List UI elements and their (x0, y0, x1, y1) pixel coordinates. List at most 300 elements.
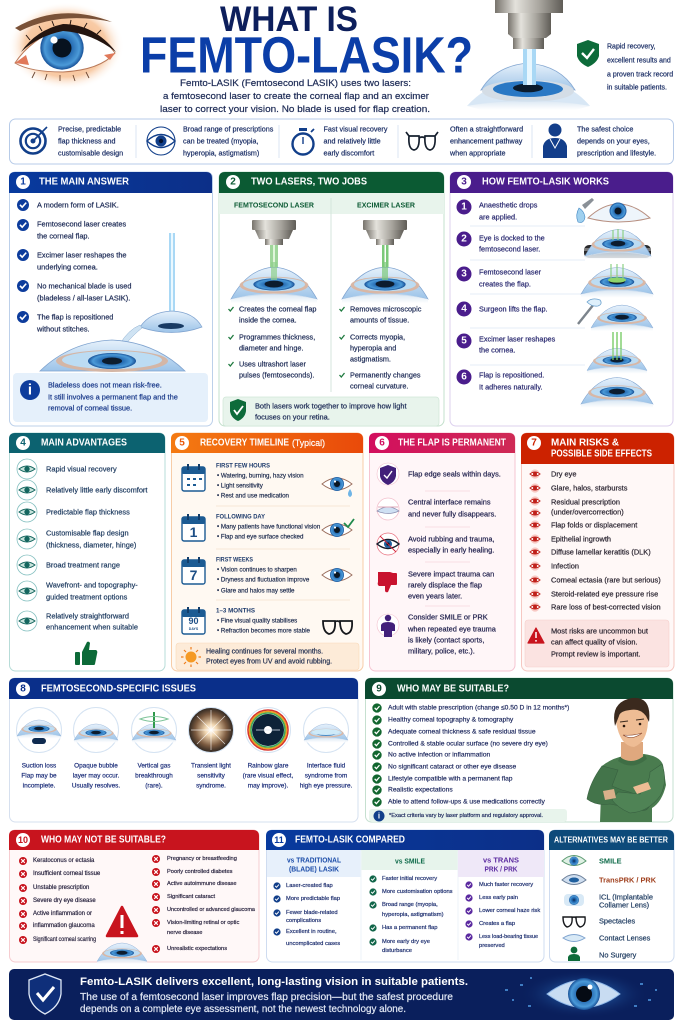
benefit: broad prescriptions: hyperopia, astigmatism) (183, 148, 259, 158)
suitability checklist: Healthy corneal topography & tomography (388, 716, 514, 724)
benefit: fast recovery: Fast visual recovery (324, 124, 388, 134)
warning callout: can affect quality of vision. (551, 638, 638, 646)
risk list: Residual prescription (551, 498, 620, 506)
callout: healing (176, 643, 359, 670)
item: impact trauma: Severe impact trauma can (408, 570, 494, 578)
panel 9 header: WHO MAY BE SUITABLE? (397, 684, 509, 694)
benefit: fast recovery (292, 124, 388, 158)
panel 10 header: WHO MAY NOT BE SUITABLE? (41, 834, 166, 846)
suitability checklist: Realistic expectations (388, 786, 453, 794)
column: vs smile: More customisation options (382, 889, 453, 895)
column: vs smile: vs SMILE (395, 856, 425, 866)
panel 11 header (266, 830, 544, 850)
advantage list: guided treatment options (46, 592, 128, 602)
alternative: contact lenses: Contact Lenses (599, 934, 651, 942)
issue: opaque bubble layer: Usually resolves. (72, 782, 120, 790)
timeline: following day: FOLLOWING DAY (216, 514, 266, 520)
panel 8 header: 8 (20, 684, 26, 694)
panel 8 header (9, 678, 358, 699)
footer banner (9, 969, 674, 1020)
excimer list: hyperopia and (350, 344, 396, 352)
step 2: femtosecond laser. (479, 244, 540, 254)
panel 2 header (219, 172, 444, 193)
footer message (80, 976, 468, 1015)
intro text (160, 78, 430, 114)
excimer list (340, 304, 422, 390)
panel 7: main risks and side effects (521, 433, 674, 671)
issue: transient light sensitivity: syndrome. (196, 782, 226, 790)
panel 7 header: MAIN RISKS & (551, 438, 619, 448)
alternatives header: ALTERNATIVES MAY BE BETTER (554, 836, 668, 844)
panel 2: two lasers, two jobs (219, 172, 444, 426)
column: vs traditional lasik (267, 850, 361, 947)
column: vs transprk / prk: Less early pain (479, 895, 518, 901)
timeline: 1-3 months: DAYS (189, 627, 199, 631)
excimer list: Corrects myopia, (350, 332, 405, 342)
panel 6 header: 6 (379, 438, 385, 448)
column: vs transprk / prk: preserved (479, 943, 505, 949)
item: impact trauma (378, 570, 494, 600)
panel 1 header: THE MAIN ANSWER (39, 176, 129, 188)
panel 1 header: 1 (20, 176, 26, 188)
info callout: i (28, 382, 32, 398)
alternative: smile: SMILE (599, 856, 622, 866)
item: flap edge (377, 463, 501, 485)
advantage icons (17, 459, 37, 631)
contraindications right: Significant cataract (167, 894, 215, 900)
timeline: following day (182, 514, 354, 541)
benefit: precise flap: Precise, predictable (58, 124, 121, 134)
panel 9 header: 9 (376, 684, 382, 694)
suitability checklist: No significant cataract or other eye disease (388, 764, 517, 770)
panel 11: femto-lasik compared (266, 830, 544, 962)
column: vs traditional lasik: Fewer blade-related (286, 910, 338, 916)
column: vs traditional lasik: complications (286, 918, 321, 924)
issue: transient light sensitivity: Transient light (191, 762, 231, 770)
item: avoid rubbing: Avoid rubbing and trauma, (408, 534, 495, 544)
checklist: Femtosecond laser creates (37, 220, 126, 228)
advantage list: enhancement when suitable (46, 622, 138, 632)
excimer list: corneal curvature. (350, 382, 408, 390)
benefit: safest choice: depends on your eyes, (577, 136, 650, 146)
femtosecond list: inside the cornea. (239, 316, 297, 324)
panel 1: the main answer (9, 172, 212, 426)
issue: rainbow glare: may improve). (248, 782, 288, 790)
column: vs transprk / prk (458, 850, 544, 949)
alternative: no surgery: No Surgery (599, 950, 637, 960)
column: vs smile: disturbance (382, 948, 412, 954)
timeline: first weeks: • Vision continues to sharpen (217, 566, 297, 574)
timeline: first weeks: FIRST WEEKS (216, 556, 253, 564)
step 5 (456, 332, 647, 374)
alternative: transprk / prk: TransPRK / PRK (599, 876, 657, 884)
timeline: first few hours: FIRST FEW HOURS (216, 462, 270, 470)
issue: transient light sensitivity (188, 708, 234, 790)
step 2 (456, 229, 651, 260)
panel 5 header: RECOVERY TIMELINE (200, 438, 289, 448)
panel 10: who may not be suitable (9, 830, 259, 964)
icon: green shield (577, 40, 599, 67)
step 5: Excimer laser reshapes (479, 334, 556, 344)
info callout (13, 373, 208, 422)
sub-header band: FEMTOSECOND LASER (234, 200, 314, 210)
risk icons (530, 469, 540, 612)
contraindications right: Poorly controlled diabetes (167, 869, 233, 875)
panel 10 header: 10 (18, 835, 28, 845)
issue: vertical gas breakthrough: (rare). (145, 782, 163, 790)
contraindications right: Pregnancy or breastfeeding (167, 856, 237, 862)
intro text: Femto-LASIK (Femtosecond LASIK) uses two lasers: (180, 78, 411, 88)
timeline: first few hours: • Rest and use medication (217, 492, 290, 500)
column: vs traditional lasik: Laser-created flap (286, 883, 333, 889)
timeline: 1-3 months: 90 (188, 616, 199, 626)
step 1 (456, 198, 650, 222)
benefit: enhancement: enhancement pathway (450, 136, 523, 146)
alternative: icl: Collamer Lens) (599, 900, 649, 910)
panel 3: how femto-lasik works (450, 172, 673, 426)
femtosecond list: diameter and hinge. (239, 344, 304, 352)
suitability checklist: Able to attend follow-ups & use medications correctly (388, 798, 546, 806)
checklist: the corneal flap. (37, 232, 90, 240)
issue: vertical gas breakthrough: Vertical gas (137, 762, 171, 770)
issue: transient light sensitivity: sensitivity (197, 772, 226, 780)
item: consider smile or prk: military, police, etc.). (408, 646, 475, 656)
illustration: laser over cornea (467, 0, 590, 110)
timeline: first few hours (182, 462, 352, 500)
callout: healing: Healing continues for several months. (206, 648, 323, 656)
timeline: 1-3 months: • Fine visual quality stabilises (217, 618, 297, 624)
step 1: Anaesthetic drops (479, 200, 538, 210)
callout text: Rapid recovery, (607, 44, 656, 50)
callout: rapid recovery (577, 40, 673, 92)
advantage list: Wavefront- and topography- (46, 580, 138, 590)
femtosecond list: Creates the corneal flap (239, 304, 316, 314)
excimer list: amounts of tissue. (350, 316, 409, 324)
advantage list: (thickness, diameter, hinge) (46, 540, 136, 550)
step 6 (456, 370, 653, 408)
item: consider smile or prk: Consider SMILE or PRK (408, 612, 488, 622)
issue: suction loss: Suction loss (22, 762, 56, 770)
timeline: following day: • Flap and eye surface checked (217, 534, 304, 540)
issue: opaque bubble layer: layer may occur. (73, 772, 119, 780)
checklist (17, 199, 132, 334)
contraindications left: Unstable prescription (33, 885, 89, 891)
step 4 (456, 299, 653, 331)
advantage list: Broad treatment range (46, 560, 120, 570)
issue: interface fluid syndrome (300, 708, 353, 790)
excimer list: Permanently changes (350, 370, 421, 380)
panel 6 header: THE FLAP IS PERMANENT (398, 438, 507, 448)
illustration: human eye (8, 2, 124, 90)
footnote: *Exact criteria vary by laser platform and regulatory approval. (389, 813, 543, 819)
column: vs transprk / prk: Lower corneal haze risk (479, 908, 540, 914)
step 3: 3 (461, 268, 467, 280)
risk list: (under/overcorrection) (551, 508, 624, 516)
suitability checklist: Lifestyle compatible with a permanent flap (388, 776, 513, 782)
step 6: It adheres naturally. (479, 382, 543, 392)
benefit: fast recovery: early discomfort (324, 148, 374, 158)
issue: interface fluid syndrome: syndrome from (305, 772, 347, 780)
illustration: flap and beam (40, 233, 202, 372)
advantage list: Customisable flap design (46, 528, 129, 538)
column: vs smile: Broad range (myopia, (382, 902, 438, 908)
warning callout: Most risks are uncommon but (551, 626, 648, 636)
risk list: Corneal ectasia (rare but serious) (551, 576, 661, 584)
panel 5 header: (Typical) (292, 438, 325, 448)
issue: opaque bubble layer (72, 708, 120, 790)
contraindications right: Active autoimmune disease (167, 881, 237, 887)
checklist: (bladeless / all-laser LASIK). (37, 294, 130, 302)
issue: suction loss: incomplete. (23, 782, 56, 790)
issue: interface fluid syndrome: Interface fluid (307, 762, 346, 770)
item: consider smile or prk: is likely (contact sports, (408, 636, 484, 644)
column: vs smile: Faster initial recovery (382, 876, 437, 882)
callout text: excellent results and (607, 58, 671, 64)
info callout: Bladeless does not mean risk-free. (48, 380, 162, 390)
benefit: enhancement (406, 124, 523, 158)
warning callout: Prompt review is important. (551, 650, 641, 658)
issue: opaque bubble layer: Opaque bubble (74, 762, 118, 770)
contraindications left: Severe dry eye disease (33, 898, 96, 904)
item: central interface (377, 498, 496, 520)
timeline: first weeks: • Dryness and fluctuation improve (217, 576, 310, 584)
excimer laser diagram (342, 220, 428, 303)
issue: rainbow glare (243, 708, 294, 790)
title (140, 0, 473, 84)
step 3: creates the flap. (479, 280, 531, 288)
panel 5 header (171, 433, 363, 453)
timeline: first weeks: 7 (190, 567, 198, 583)
panel 11 header: FEMTO-LASIK COMPARED (295, 834, 405, 846)
step 5: 5 (461, 336, 467, 346)
femtosecond list: Uses ultrashort laser (239, 360, 306, 368)
excimer list: Removes microscopic (350, 304, 422, 314)
contraindications left: inflammation glaucoma (33, 923, 95, 929)
panel 4 header: 4 (20, 438, 26, 448)
warning triangle with eye (97, 907, 147, 964)
panel 3 header (450, 172, 673, 193)
panel 9 header (365, 678, 673, 699)
suitability checklist (372, 703, 569, 807)
timeline: first few hours: • Light sensitivity (217, 482, 264, 490)
panel 2 header: TWO LASERS, TWO JOBS (251, 176, 367, 188)
risk list (551, 470, 661, 612)
column: vs transprk / prk: vs TRANS (483, 856, 519, 864)
timeline: 1-3 months: 1–3 MONTHS (216, 608, 255, 614)
issue: suction loss: Flap may be (21, 772, 57, 780)
panel 5: recovery timeline (171, 433, 363, 671)
footnote (369, 809, 567, 822)
contraindications left: Active inflammation or (33, 911, 92, 917)
risk list: Epithelial ingrowth (551, 534, 611, 544)
item: flap edge: Flap edge seals within days. (408, 470, 501, 478)
intro text: a femtosecond laser to create the corneal flap and an excimer (163, 91, 429, 101)
timeline: 1-3 months: • Refraction becomes more stable (217, 628, 311, 634)
panel 6: the flap is permanent (369, 433, 515, 671)
benefit: safest choice (543, 124, 656, 158)
benefit: enhancement: when appropriate (449, 148, 506, 158)
callout text: a proven track record (607, 72, 673, 78)
checklist: A modern form of LASIK. (37, 200, 119, 210)
step 1: 1 (461, 202, 467, 212)
checklist: The flap is repositioned (37, 312, 113, 322)
column: vs traditional lasik: vs TRADITIONAL (287, 856, 341, 864)
issue: rainbow glare: (rare visual effect, (243, 772, 294, 780)
timeline: first weeks (182, 556, 352, 594)
footnote: i (378, 812, 380, 820)
contraindications right: Unrealistic expectations (167, 946, 227, 952)
timeline: following day: 1 (190, 524, 198, 540)
panel 7 header (521, 433, 674, 464)
footer message: Femto-LASIK delivers excellent, long-lasting vision in suitable patients. (80, 976, 468, 988)
issue: rainbow glare: Rainbow glare (248, 762, 289, 770)
step 6: Flap is repositioned. (479, 370, 544, 380)
panel 6 header (369, 433, 515, 453)
contraindications left: Keratoconus or ectasia (33, 858, 95, 864)
step 5: the cornea. (479, 346, 516, 354)
sub-header band (219, 193, 444, 392)
benefit: precise flap: flap thickness and (58, 136, 116, 146)
step 2: Eye is docked to the (479, 234, 545, 242)
item: consider smile or prk (377, 612, 497, 656)
timeline: following day: • Many patients have functional vision (217, 524, 321, 530)
suitability checklist: Adult with stable prescription (change ≤0.50 D in 12 months*) (388, 704, 569, 712)
step 6: 6 (461, 372, 467, 382)
risk list: Diffuse lamellar keratitis (DLK) (551, 548, 651, 556)
benefit: precise flap (20, 124, 123, 158)
panel 3 header: 3 (461, 176, 467, 188)
item: consider smile or prk: when repeated eye trauma (407, 624, 497, 634)
panel 2 header: 2 (230, 176, 236, 188)
callout: healing: Protect eyes from UV and avoid rubbing. (206, 658, 332, 666)
panel 1 header (9, 172, 212, 193)
suitability checklist: No active infection or inflammation (388, 752, 490, 758)
column: vs traditional lasik: uncomplicated cases (286, 941, 340, 947)
suitability checklist: Controlled & stable ocular surface (no severe dry eye) (388, 740, 548, 748)
contraindications right: Uncontrolled or advanced glaucoma (167, 907, 256, 913)
item: impact trauma: even years later. (408, 592, 462, 600)
panel 9: who may be suitable (365, 678, 673, 822)
advantage list: Relatively straightforward (46, 612, 129, 620)
step 2: 2 (461, 234, 467, 244)
column: vs smile: Has a permanent flap (382, 925, 437, 931)
intro text: laser to correct your vision. No blade is used for flap creation. (160, 104, 430, 114)
panel: alternatives may be better (549, 830, 674, 962)
issue: vertical gas breakthrough: breakthrough (135, 772, 173, 780)
callout text: in suitable patients. (607, 84, 667, 92)
suitability checklist: Adequate corneal thickness & safe residual tissue (388, 728, 536, 736)
title: WHAT IS (220, 0, 358, 39)
step 3 (456, 264, 653, 298)
item: avoid rubbing: especially in early healing. (408, 546, 494, 554)
info callout: It still involves a permanent flap and the (48, 392, 178, 402)
footer message: depends on a complete eye assessment, not the newest technology alone. (80, 1003, 406, 1015)
panel 5 header: 5 (179, 438, 185, 448)
risk list: Rare loss of best-corrected vision (551, 602, 661, 612)
illustration: glowing eye (505, 970, 657, 1018)
alternative: icl (564, 892, 653, 910)
item: avoid rubbing (377, 533, 495, 555)
benefit: safest choice: The safest choice (577, 124, 633, 134)
risk list: Infection (551, 562, 579, 570)
warning callout (525, 620, 669, 667)
panel 4 header: MAIN ADVANTAGES (41, 438, 127, 448)
advantage list: Relatively little early discomfort (46, 486, 147, 494)
timeline: 1-3 months (182, 607, 352, 634)
alternative: spectacles: Spectacles (599, 916, 635, 926)
item: central interface: Central interface remains (408, 498, 491, 506)
callout: both lasers: focuses on your retina. (255, 412, 330, 422)
checklist: No mechanical blade is used (37, 282, 132, 290)
contraindications left: Insufficient corneal tissue (33, 871, 101, 877)
panel 4: main advantages (9, 433, 165, 671)
panel 11 header: 11 (274, 835, 284, 845)
femtosecond list: Programmes thickness, (239, 332, 315, 342)
step 1: are applied. (479, 212, 517, 222)
alternative: icl: ICL (Implantable (599, 892, 653, 902)
item: central interface: and never fully disappears. (408, 510, 496, 518)
panel 7 header: POSSIBLE SIDE EFFECTS (551, 448, 652, 460)
step 3: Femtosecond laser (479, 268, 542, 276)
checklist: without stitches. (36, 324, 90, 334)
issue: suction loss (16, 708, 62, 790)
advantage list: Rapid visual recovery (46, 464, 117, 474)
panel 4 header (9, 433, 165, 453)
contraindications right: Vision-limiting retinal or optic (167, 920, 239, 926)
footer message: The use of a femtosecond laser improves flap precision—but the safest procedure (80, 991, 453, 1003)
column: vs transprk / prk: Creates a flap (479, 921, 515, 927)
column: vs transprk / prk: Much faster recovery (479, 882, 533, 888)
panel 8: femtosecond-specific issues (9, 678, 358, 822)
panel 7 header: 7 (531, 438, 537, 448)
femtosecond list: pulses (femtoseconds). (239, 370, 314, 380)
column: vs smile (361, 850, 458, 960)
benefit: broad prescriptions: Broad range of prescriptions (183, 124, 274, 134)
excimer list: astigmatism. (350, 354, 391, 364)
benefit: broad prescriptions (147, 124, 274, 158)
item: impact trauma: rarely displace the flap (408, 580, 482, 590)
icon: thumbs up (75, 642, 97, 665)
title: FEMTO-LASIK? (140, 26, 473, 84)
panel 8 header: FEMTOSECOND-SPECIFIC ISSUES (41, 684, 196, 694)
column: vs smile: hyperopia, astigmatism) (382, 912, 444, 918)
benefit: fast recovery: and relatively little (324, 136, 381, 146)
column: vs traditional lasik: (BLADE) LASIK (289, 864, 340, 874)
step 4: 4 (461, 304, 467, 314)
contraindications left (19, 857, 101, 944)
sub-header band: EXCIMER LASER (357, 200, 415, 210)
key benefits strip (10, 119, 674, 164)
risk list: Glare, halos, starbursts (551, 484, 628, 492)
column: vs traditional lasik: More predictable flap (286, 896, 340, 902)
checklist: underlying cornea. (37, 262, 98, 272)
callout text (607, 44, 673, 92)
column: vs traditional lasik: Excellent in routine, (286, 929, 337, 935)
timeline: first weeks: • Glare and halos may settle (217, 588, 295, 594)
illustration: smiling man (587, 698, 666, 822)
risk list: Dry eye (551, 470, 576, 478)
column: vs transprk / prk: PRK / PRK (484, 864, 518, 874)
step 4: Surgeon lifts the flap. (479, 304, 548, 314)
femtosecond list (228, 304, 316, 380)
callout: both lasers: Both lasers work together to improve how light (255, 402, 407, 410)
risk list: Steroid-related eye pressure rise (551, 590, 658, 598)
benefit: precise flap: customisable design (58, 148, 123, 158)
contraindications left: Significant corneal scarring (33, 937, 96, 943)
column: vs transprk / prk: Less load-bearing tissue (479, 934, 538, 940)
contraindications right (152, 855, 256, 953)
risk list: Flap folds or displacement (551, 520, 637, 530)
